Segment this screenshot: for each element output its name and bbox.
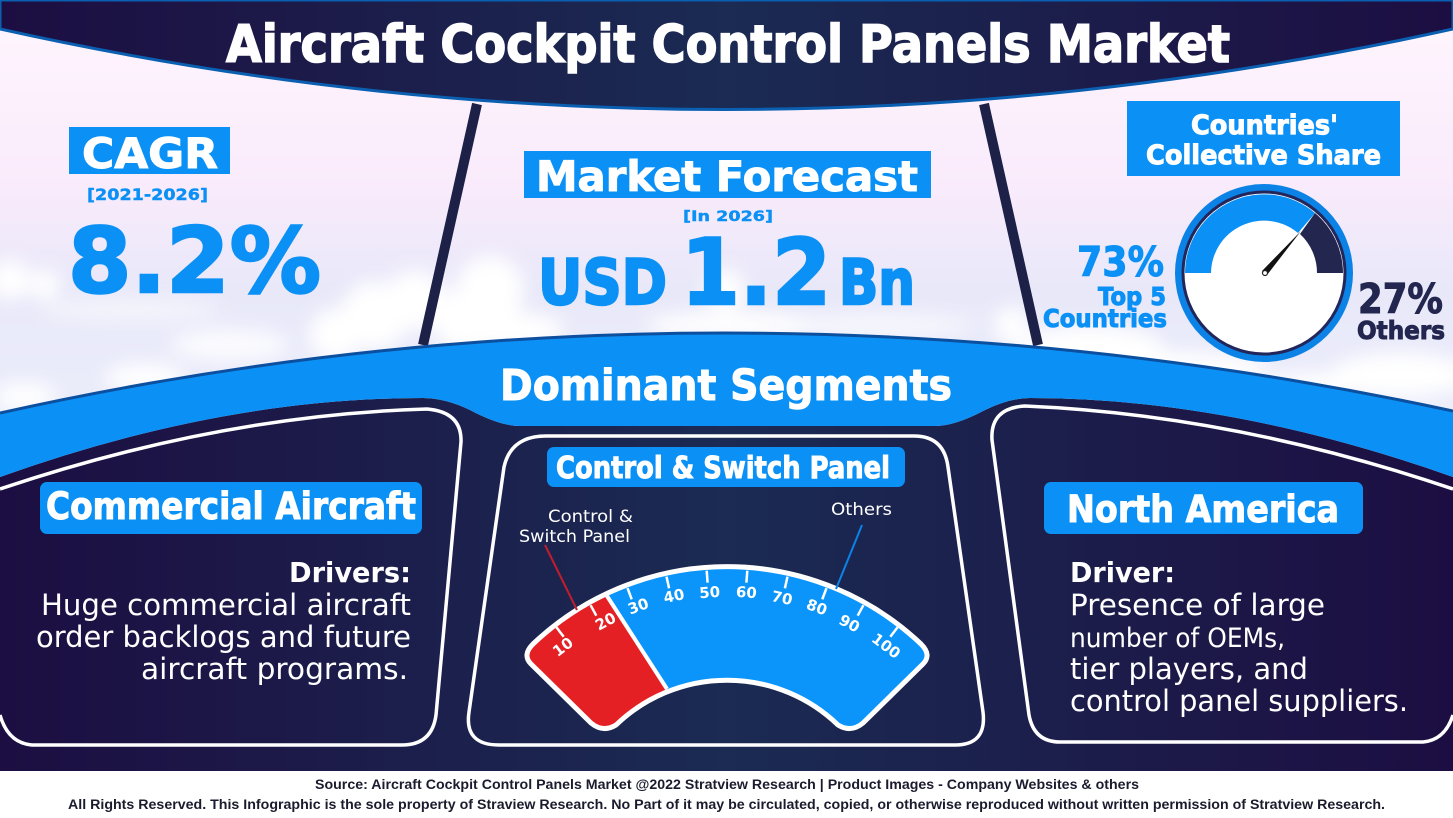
segment gauge: 10 <box>549 634 577 660</box>
panel: commercial aircraft <box>0 409 461 745</box>
footer <box>0 771 1453 818</box>
stat: market forecast: Bn <box>839 246 915 319</box>
stat: countries collective share: Collective Share <box>1146 140 1381 171</box>
stat: CAGR: 8.2% <box>68 209 321 314</box>
segment gauge: 30 <box>625 594 651 618</box>
stat: countries collective share: 73% <box>1077 238 1164 286</box>
stat: market forecast <box>524 151 931 326</box>
panel: control and switch panel <box>468 436 983 745</box>
segment gauge: 20 <box>592 609 619 634</box>
panel: north america: Driver: <box>1070 556 1175 589</box>
segment gauge: 60 <box>735 583 757 602</box>
panel: commercial aircraft: Drivers: <box>289 556 411 589</box>
segment gauge <box>527 525 927 729</box>
panel: north america: tier players, and <box>1070 652 1308 686</box>
stat: countries collective share: Top 5 <box>1098 282 1166 311</box>
panel: commercial aircraft: aircraft programs. <box>141 652 408 686</box>
segment gauge: 100 <box>868 629 904 663</box>
segment gauge: 50 <box>699 583 721 602</box>
gauge callout labels: Switch Panel <box>519 527 630 547</box>
panel: commercial aircraft: Commercial Aircraft <box>46 485 416 528</box>
stat: market forecast: 1.2 <box>681 221 831 326</box>
gauge callout labels: Others <box>831 500 892 520</box>
panel: north america <box>992 406 1453 742</box>
panel: control and switch panel: Control & Switch Panel <box>556 451 890 486</box>
stat: CAGR: CAGR <box>82 129 218 178</box>
gauge callout labels <box>519 500 892 547</box>
header banner <box>0 0 1453 110</box>
panel: north america: control panel suppliers. <box>1070 684 1408 718</box>
sky background <box>0 0 1453 440</box>
stat: CAGR <box>68 127 321 314</box>
segment gauge: 40 <box>662 585 686 607</box>
stat: market forecast: Market Forecast <box>536 152 918 201</box>
segment gauge: 80 <box>804 595 830 619</box>
footer: All Rights Reserved. This Infographic is the sole property of Straview Research. No Part of it may be circulated, copied, or otherwise reproduced without written permission of Stratview Research. <box>68 797 1385 812</box>
panel: north america: number of OEMs, <box>1070 623 1285 654</box>
share gauge <box>1175 184 1353 362</box>
panel: commercial aircraft: order backlogs and future <box>36 620 411 654</box>
footer: Source: Aircraft Cockpit Control Panels Market @2022 Stratview Research | Product Images - Company Websites & others <box>315 777 1139 792</box>
stat: market forecast: [In 2026] <box>683 209 773 225</box>
segment gauge: 70 <box>770 587 794 609</box>
windshield struts <box>423 104 1038 345</box>
band heading: Dominant Segments <box>500 361 952 411</box>
dominant segments band <box>0 333 1453 477</box>
segment gauge: 90 <box>836 611 863 636</box>
panel: commercial aircraft: Huge commercial aircraft <box>41 588 411 622</box>
panel: north america: North America <box>1067 488 1339 531</box>
stat: countries collective share: Countries <box>1043 304 1167 333</box>
stat: countries collective share: Countries' <box>1191 110 1338 141</box>
stat: countries collective share: Others <box>1357 316 1445 345</box>
stat: market forecast: USD <box>538 246 667 319</box>
stat: CAGR: [2021-2026] <box>87 185 208 204</box>
dark dashboard body <box>0 398 1453 771</box>
stat: countries collective share <box>1043 101 1445 362</box>
title: Aircraft Cockpit Control Panels Market <box>226 15 1230 75</box>
panel: north america: Presence of large <box>1070 588 1325 622</box>
gauge callout labels: Control & <box>548 507 633 527</box>
